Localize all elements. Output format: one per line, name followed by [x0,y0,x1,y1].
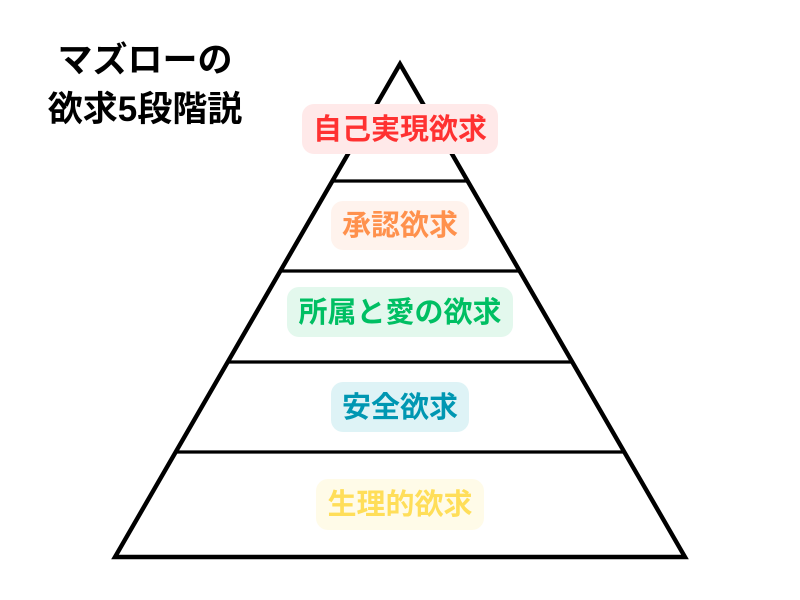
label: safety [331,382,469,432]
title [48,41,242,129]
label: belonging and love: 所属と愛の欲求 [298,297,502,329]
label: physiological [316,479,484,530]
label: physiological: 生理的欲求 [327,489,472,521]
label: esteem: 承認欲求 [342,210,458,242]
label: esteem [331,201,469,250]
label: self-actualization [302,104,498,154]
title: 欲求5段階説 [48,90,242,129]
label: safety: 安全欲求 [342,392,458,424]
label: self-actualization: 自己実現欲求 [313,114,487,146]
title: マズローの [57,41,232,80]
label: belonging and love [287,287,513,337]
